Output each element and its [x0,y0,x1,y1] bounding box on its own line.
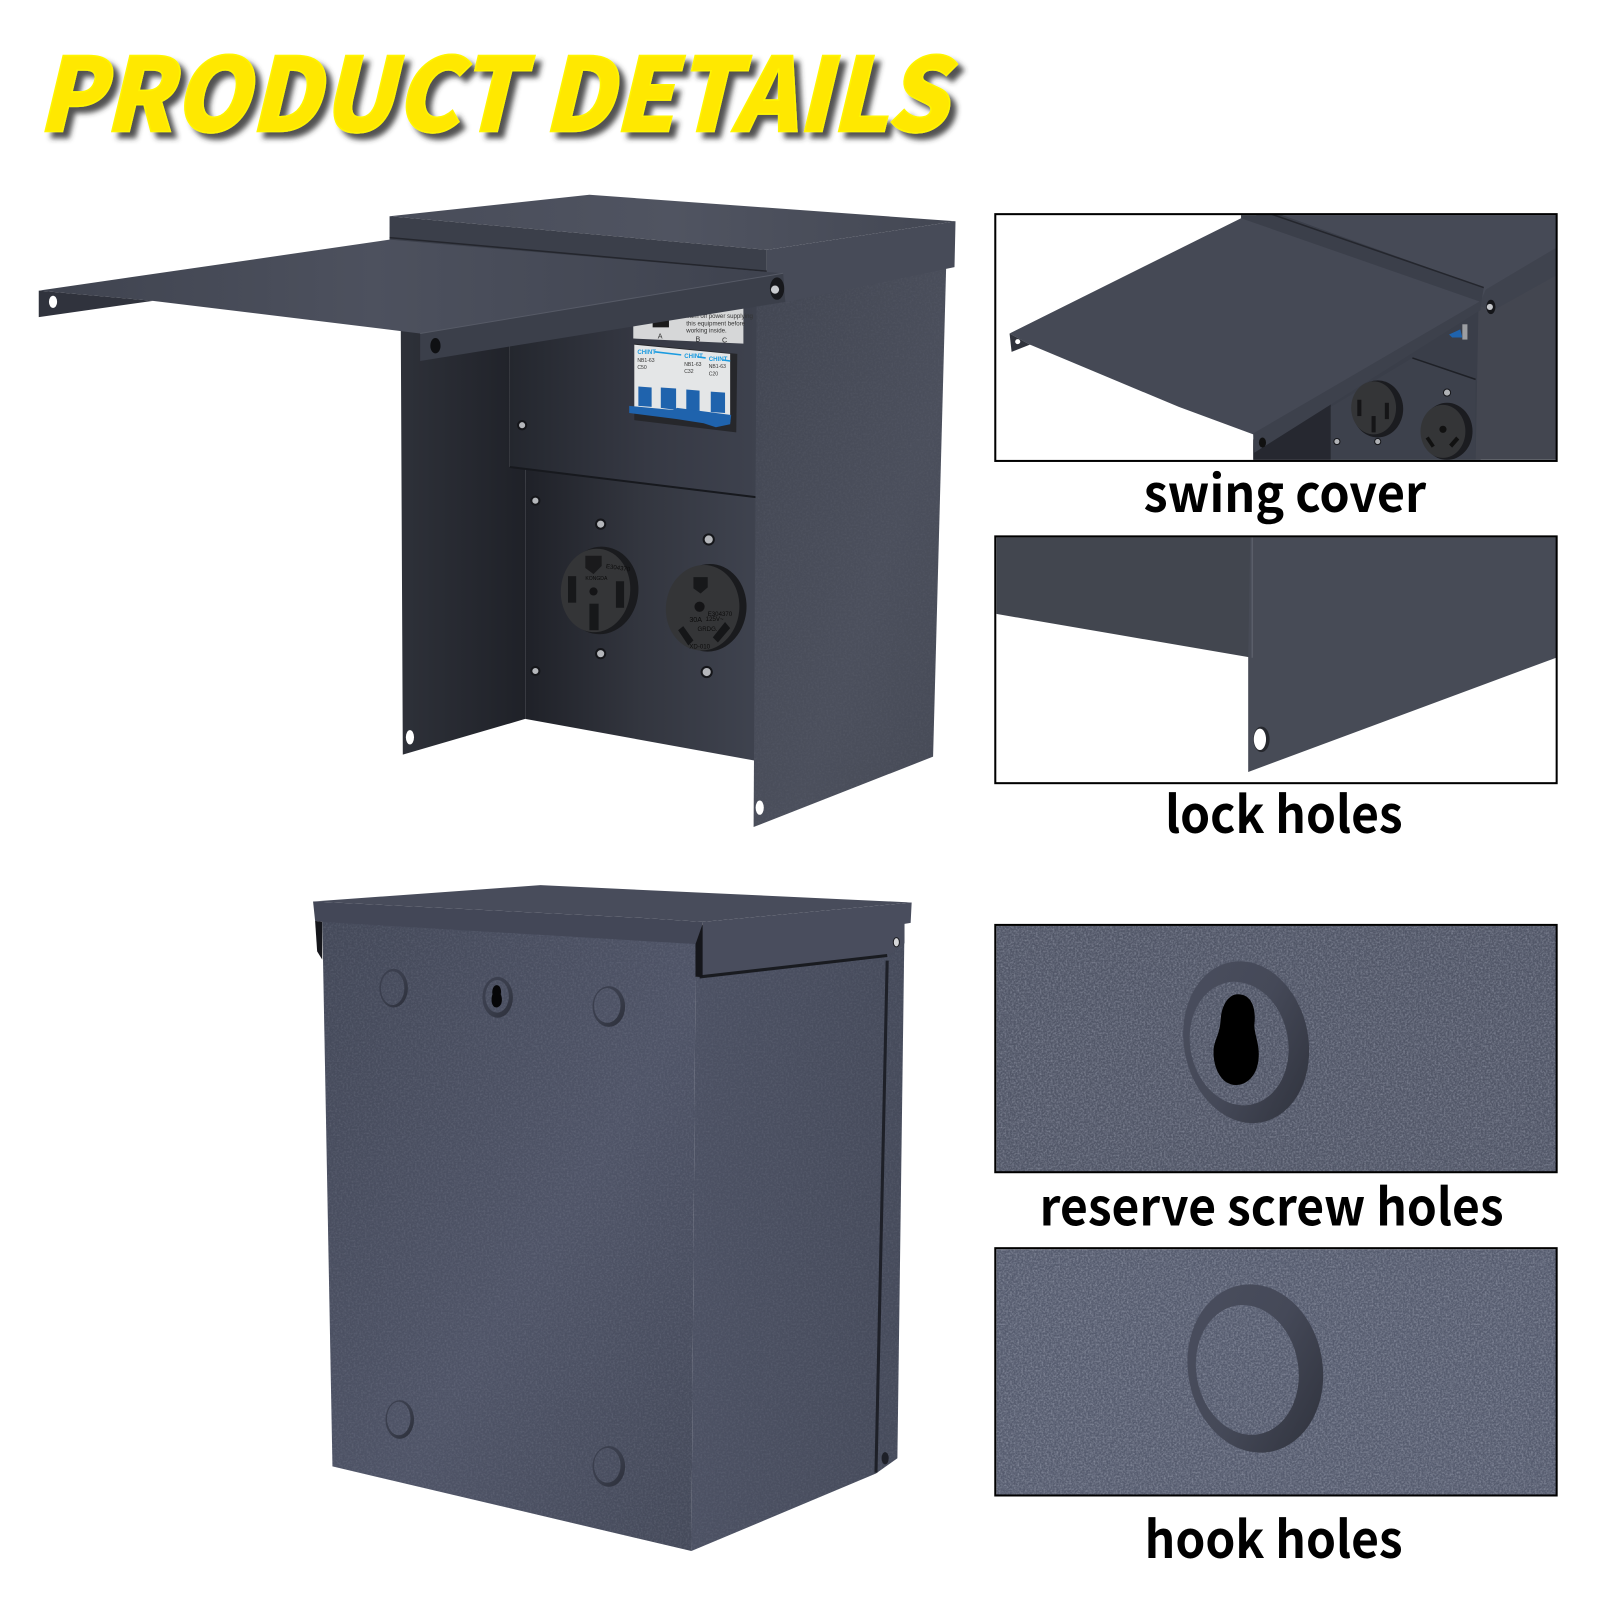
hook hole top left [379,969,408,1008]
box right side panel [754,260,946,827]
panel: lock holes detail [995,536,1557,783]
rear face [322,918,700,1551]
hook hole bottom left [385,1400,414,1439]
left outlet 50A [557,543,643,638]
screws on back panel [518,421,714,677]
lock hole [1253,727,1270,752]
roof portion [1256,215,1556,294]
product: open box with swing cover [39,195,956,827]
keyhole [482,977,513,1018]
hinge screw [893,938,899,947]
right outlet 30A: GRDG. [698,626,718,633]
product: closed box rear view [313,885,912,1555]
mini breaker [1449,324,1467,340]
hook hole top right [592,986,625,1027]
label: reserve screw holes: reserve screw holes [1040,1167,1504,1241]
side panel [1476,260,1556,460]
panel: reserve screw holes detail [995,925,1557,1172]
box interior lower back panel [525,469,758,761]
left outlet 50A: E304370 [605,563,631,573]
side face [691,924,905,1551]
right outlet 30A: XD-010 [689,644,711,651]
hook hole bottom right [592,1446,625,1487]
circuit breakers: NB1-63 [709,364,726,370]
cover front flange [1253,301,1481,453]
warning label: C [722,337,727,345]
box interior left wall [401,316,525,755]
open cover [1010,218,1481,434]
label: lock holes: lock holes [1165,774,1403,848]
lock hole left [406,730,414,744]
panel: swing cover detail [995,209,1557,461]
label: swing cover: swing cover [1144,453,1427,527]
warning label [633,302,753,345]
keyhole ring [1183,961,1310,1124]
warning label: A [658,333,663,341]
circuit breakers: NB1-63 [684,362,702,368]
circuit breakers: CHINT [709,356,728,363]
title: PRODUCT DETAILS [37,15,958,162]
small outlets [1351,380,1403,437]
swing cover [39,240,785,361]
circuit breakers: C20 [709,371,718,377]
panel: hook holes detail [995,1248,1557,1495]
lock hole right [756,801,764,815]
hook ring [1188,1284,1324,1453]
box roof [390,195,956,302]
circuit breakers: C50 [637,365,647,371]
right outlet 30A: 30A [689,616,702,624]
cover holes [49,296,441,353]
right outlet 30A: 125V~ [706,616,724,623]
side groove [876,961,887,1473]
circuit breakers: CHINT [637,349,656,356]
warning label: working inside. [685,327,727,334]
left outlet 50A: KONGDA [585,576,608,582]
right outlet 30A [662,560,751,655]
right outlet 30A: E304370 [708,611,733,618]
circuit breakers [629,344,737,432]
small screws [1334,389,1451,445]
roof [313,885,912,977]
interior behind cover [1253,296,1481,460]
label: hook holes: hook holes [1145,1499,1403,1573]
box interior upper back panel [510,296,760,498]
warning label: B [695,336,700,344]
cover hinge screw [770,277,784,300]
circuit breakers: NB1-63 [637,358,655,364]
circuit breakers: C32 [684,369,694,375]
bottom screw [882,1452,889,1464]
circuit breakers: CHINT [684,353,703,360]
hinge screw and holes [1015,300,1495,448]
warning label: this equipment before [686,320,746,327]
warning label: Turn off power supplying [686,313,753,320]
